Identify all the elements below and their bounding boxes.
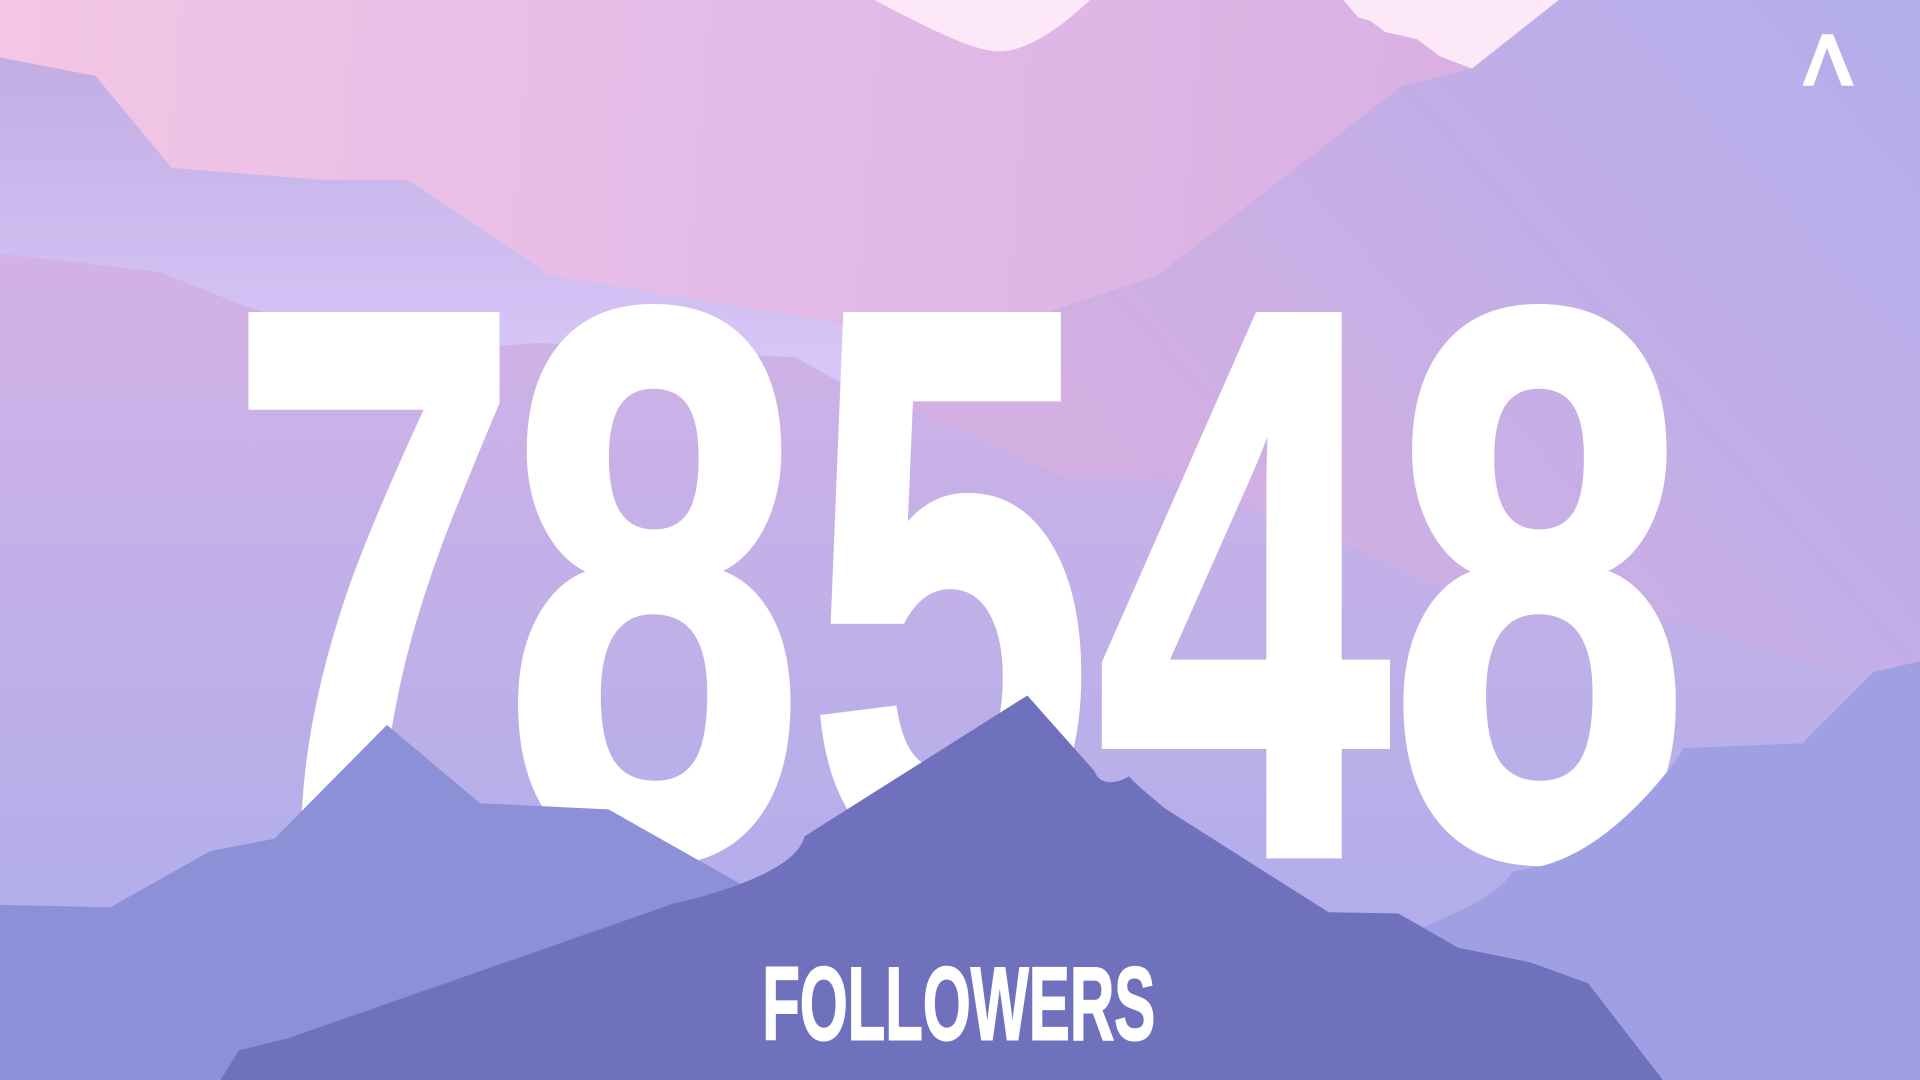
mountain: dark front peak (220, 696, 1663, 1080)
mountain: left blue foreground (0, 725, 857, 1080)
highlights: pale sky shapes at top (874, 0, 1580, 73)
big number: 78548 (229, 147, 1689, 1020)
mountain: right blue foreground (1347, 661, 1920, 1080)
digit 5: 5 (808, 147, 1092, 1019)
mountain: upper left range (0, 58, 900, 514)
mountain: upper right range (735, 0, 1920, 857)
label: FOLLOWERS: FOLLOWERS (762, 947, 1155, 1063)
digit 8 second: 8 (1390, 148, 1689, 1020)
digit 4: 4 (1097, 147, 1393, 1019)
icon: logo caret (1802, 34, 1854, 86)
mountain: middle lavender range (0, 253, 1920, 1080)
digit 8: 8 (504, 148, 804, 1020)
digit 7: 7 (229, 148, 519, 1019)
